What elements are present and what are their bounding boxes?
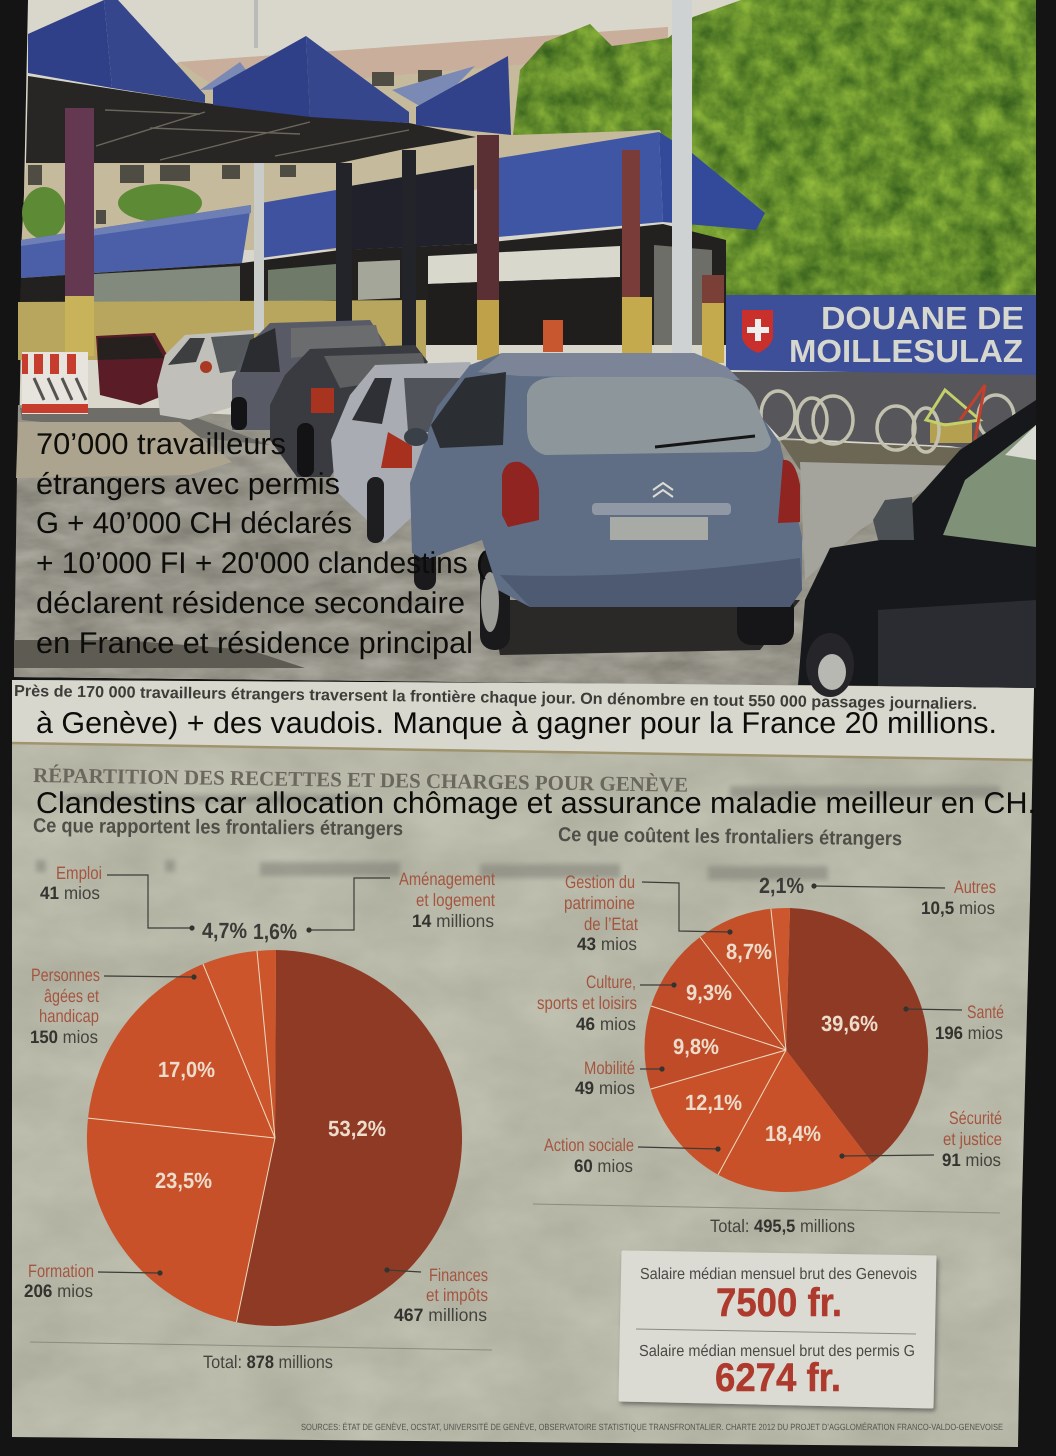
label: Emploi [40,863,195,931]
percent: 8,7%: 8,7% [726,939,772,964]
low building blue bands [21,132,765,278]
divider and total: income [30,1342,492,1372]
newspaper paper [12,680,1034,1447]
label: Personnes âgées et handicap: handicap [39,1006,99,1026]
wiper [655,436,755,447]
divider and total: costs [533,1204,1000,1236]
label: Personnes âgées et handicap: Personnes [31,965,100,985]
labels and leaders: costs [537,872,1004,1176]
slice: Emploi 4,7% [203,951,275,1138]
percent: 17,0%: 17,0% [158,1057,215,1082]
chevrons [653,483,673,497]
overlay note on photo: étrangers avec permis [36,468,340,501]
sign text: DOUANE DE [821,300,1024,336]
subtitle: income: Ce que rapportent les frontaliers étrangers [33,815,403,840]
label: Aménagement et logement: et logement [416,890,495,910]
label: Santé [903,1002,1004,1043]
label: Autres: 10,5 mios [921,898,995,918]
plate and strip [592,503,731,515]
subtitle: cost: Ce que coûtent les frontaliers étrangers [558,824,902,850]
white car [157,330,254,420]
percent: 39,6%: 39,6% [821,1011,878,1036]
label: Autres: Autres [954,877,996,897]
label: Santé: 196 mios [935,1023,1003,1043]
overlay note on photo: 70’000 travailleurs [36,428,286,461]
overlay note on photo [36,428,486,660]
barrier [22,352,88,414]
dark car [270,345,428,477]
red car [96,333,170,405]
label: Aménagement et logement [306,869,495,933]
slice: Action sociale 12,1% [650,1050,786,1175]
label: Finances et impôts [384,1265,488,1325]
slice: Formation 23,5% [87,1118,275,1322]
label: Aménagement et logement: Aménagement [399,869,495,889]
pavement left [16,422,232,478]
divider and total: costs: Total: 495,5 millions [710,1216,855,1236]
tram [428,245,712,352]
permis G salary label: Salaire médian mensuel brut des permis G [639,1343,915,1360]
label: Mobilité: 49 mios [575,1078,635,1098]
taillights [502,462,539,527]
label: Gestion du patrimoine de l'Etat: de l’Etat [584,914,638,934]
label: Personnes âgées et handicap: 150 mios [30,1027,98,1047]
sky [14,0,1036,688]
label: Formation: 206 mios [24,1281,93,1301]
overlay note line 3: Clandestins car allocation chômage et assurance maladie meilleur en CH. [36,787,1036,820]
canopy beams [96,110,409,160]
Genevois salary value: 7500 fr. [716,1281,842,1325]
slice: Autres 2,1% [771,908,790,1050]
overlay note continuation: à Genève) + des vaudois. Manque à gagner pour la France 20 millions. [36,707,997,740]
bikes [726,372,1036,460]
label: Culture, sports et loisirs: 46 mios [576,1014,636,1034]
photo right edge [1036,0,1056,688]
permis G salary value: 6274 fr. [715,1356,841,1400]
section rule [12,743,1032,760]
photo: border crossing at Moillesulaz [14,0,1056,697]
Genevois salary label: Salaire médian mensuel brut des Genevois [640,1266,917,1283]
label: Action sociale [544,1135,721,1176]
label: Mobilité: Mobilité [584,1058,635,1078]
label: Sécurité et justice [839,1108,1002,1170]
label: Culture, sports et loisirs: sports et loisirs [537,993,637,1013]
label: Gestion du patrimoine de l'Etat: 43 mios [577,934,637,954]
slice: Santé 39,6% [786,908,928,1163]
overlay note on photo: + 10’000 FI + 20'000 clandestins ( [36,547,486,580]
blue roofs [28,0,511,135]
label: Gestion du patrimoine de l'Etat: patrimoine [564,893,635,913]
slice: Personnes âgées et handicap 17,0% [88,964,275,1138]
shadow below blue car [490,600,800,655]
chart heading: RÉPARTITION DES RECETTES ET DES CHARGES POUR GENÈVE [33,763,688,797]
percent: 9,8%: 9,8% [673,1034,719,1059]
label: Action sociale: 60 mios [574,1156,633,1176]
label: Personnes âgées et handicap [30,965,197,1047]
slice: Finances et impôts 53,2% [236,950,462,1326]
redacted smudges [36,786,1000,880]
sign: Douane de Moillesulaz: MOILLESULAZ [789,333,1023,369]
yellow wall base [18,300,426,360]
slice: Culture, sports et loisirs 9,3% [651,937,786,1050]
mirror [404,428,428,446]
black car right [798,400,1036,697]
label: Finances et impôts: 467 millions [394,1305,487,1325]
label: Autres [811,877,996,918]
slice: Mobilité 9,8% [645,1006,786,1089]
label: Gestion du patrimoine de l'Etat [564,872,733,954]
blue Citroen [404,353,802,650]
label: Gestion du patrimoine de l'Etat: Gestion du [565,872,635,892]
slice: Sécurité et justice 18,4% [718,1050,872,1192]
label: Aménagement et logement: 14 millions [412,911,494,931]
label: Finances et impôts: et impôts [426,1285,488,1305]
bumper [500,558,802,607]
low building interior [18,224,726,345]
queue cars [96,320,477,543]
background building wall [21,27,668,250]
label: Mobilité [575,1058,665,1098]
percent: 4,7%: 4,7% [202,918,247,943]
label: Culture, sports et loisirs [537,972,677,1034]
trees right [513,0,1036,296]
overlay note on photo: déclarent résidence secondaire [36,587,465,620]
slice: Gestion du patrimoine 8,7% [700,909,786,1050]
label: Sécurité et justice: 91 mios [942,1150,1001,1170]
overlay note on photo: G + 40’000 CH déclarés [36,507,352,540]
label: Formation: Formation [28,1261,94,1281]
Swiss shield [742,310,773,353]
sign: Douane de Moillesulaz [726,295,1036,375]
label: Formation [24,1261,163,1301]
percent: 9,3%: 9,3% [686,980,732,1005]
salary box [620,1252,935,1407]
label: Finances et impôts: Finances [429,1265,488,1285]
percent: 2,1%: 2,1% [759,873,804,898]
overlay note on photo: en France et résidence principal [36,627,473,660]
utility pole [672,0,692,356]
right kerb and road [780,440,963,470]
building windows [28,70,442,224]
roof highlight [478,353,740,380]
columns [65,0,724,363]
label: Emploi: Emploi [56,863,102,883]
label: Sécurité et justice: et justice [943,1129,1002,1149]
road [14,405,1036,688]
road far dark part [20,408,270,445]
rear window [527,377,771,455]
silver car [331,362,477,543]
dark patch bottom left [14,640,305,668]
label: Personnes âgées et handicap: âgées et [44,986,99,1006]
canopy underside [26,76,476,163]
side windows [431,372,506,448]
label: Sécurité et justice: Sécurité [949,1108,1002,1128]
pie chart: costs [645,908,928,1192]
label: Santé: Santé [967,1002,1004,1022]
labels and leaders: income [24,863,495,1325]
percent: 53,2%: 53,2% [328,1116,386,1141]
label: Emploi: 41 mios [40,883,100,903]
caption strip paper [12,680,1034,760]
grey van [232,320,386,430]
percent: 1,6%: 1,6% [253,919,297,944]
photo caption: Près de 170 000 travailleurs étrangers traversent la frontière chaque jour. On dénombre en tout 550 000 passages journaliers. [14,683,977,713]
slice: Aménagement et logement 1,6% [257,950,276,1138]
background building roof [179,27,668,90]
small trees left [22,184,202,239]
windows [94,260,400,304]
percent: 18,4%: 18,4% [765,1121,821,1146]
divider and total: income: Total: 878 millions [203,1352,333,1372]
label: Culture, sports et loisirs: Culture, [586,972,636,992]
percent: 12,1%: 12,1% [685,1090,742,1115]
pie chart: income [87,950,462,1326]
label: Action sociale: Action sociale [544,1135,634,1155]
percent: 23,5%: 23,5% [155,1168,212,1193]
